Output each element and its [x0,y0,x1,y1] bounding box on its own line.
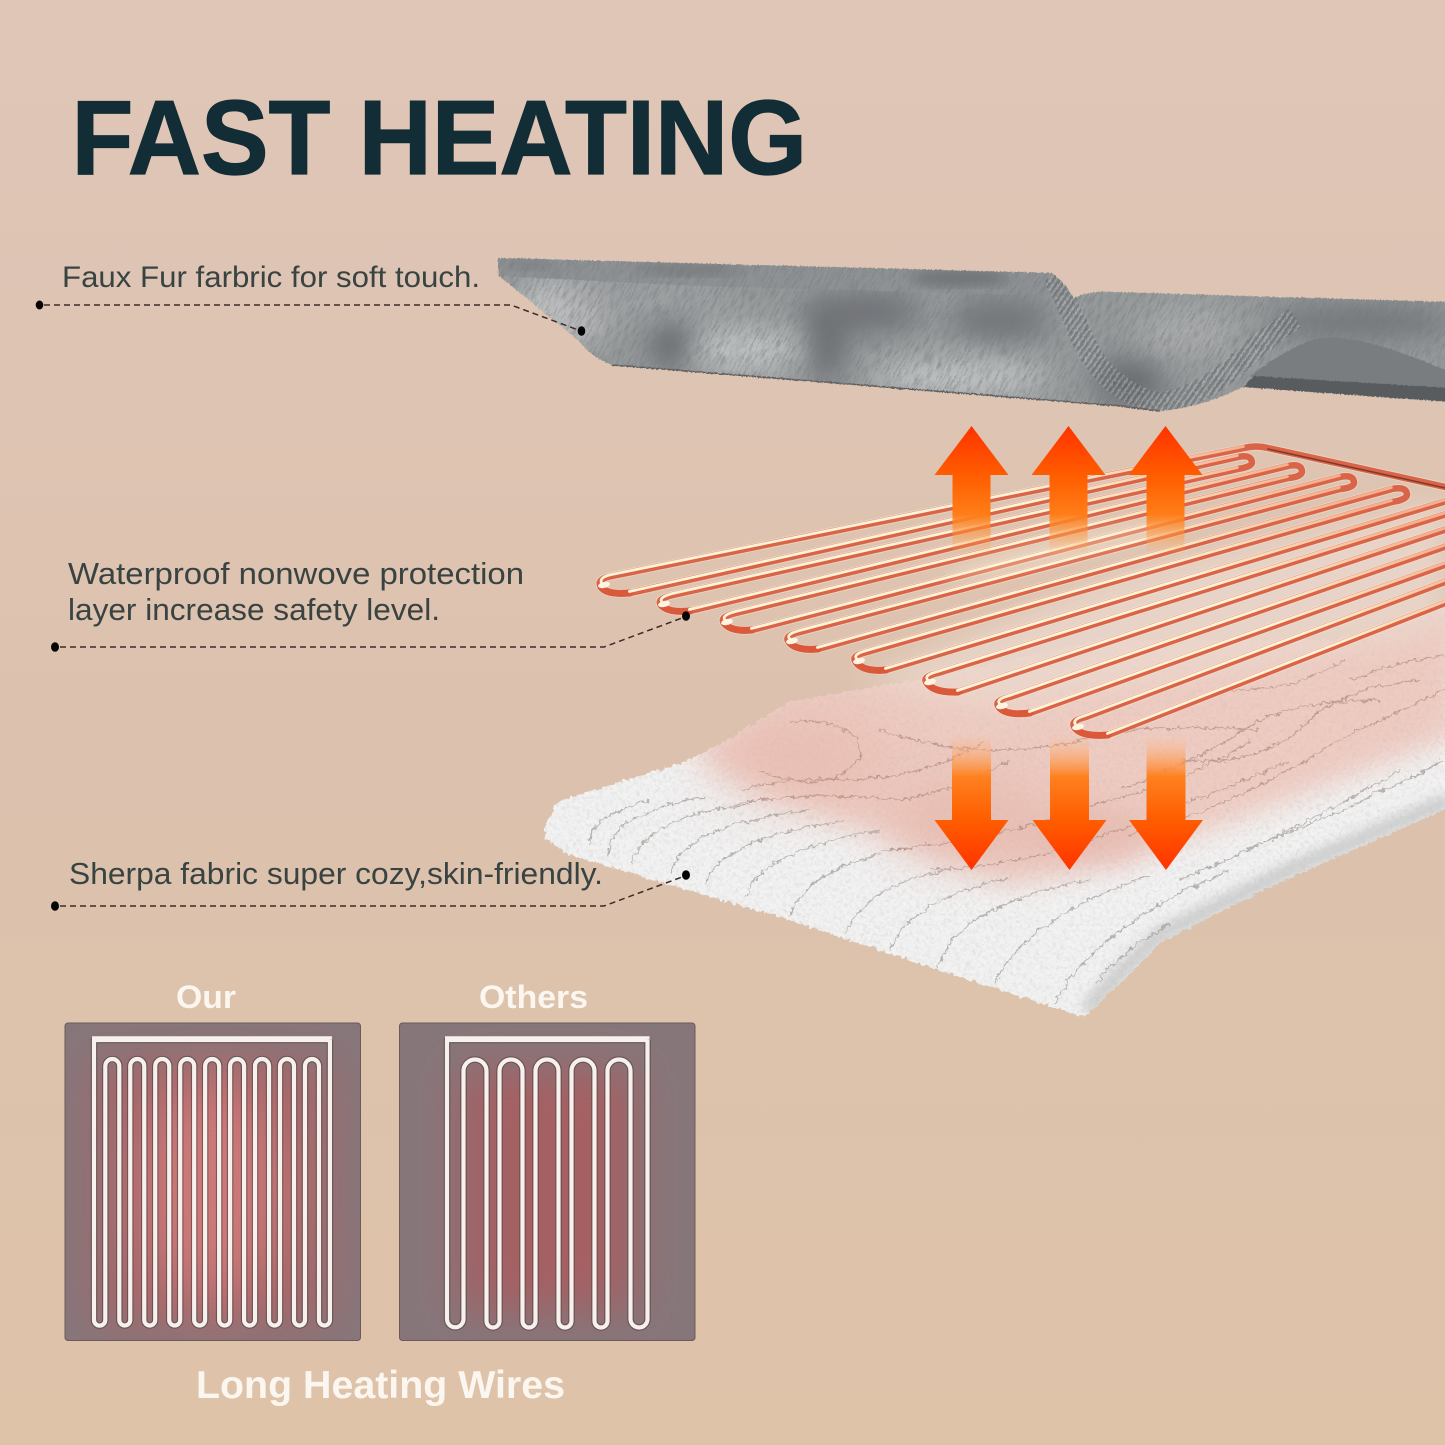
panel: our heating pad [65,1023,360,1340]
fleece ripple lines [590,760,1445,1003]
callout: faux fur: Faux Fur farbric for soft touch. [62,261,480,294]
warm pink heated area [690,590,1445,885]
title: FAST HEATING [72,79,807,197]
heading: our: Our [176,979,236,1015]
layer: sherpa fabric [530,590,1445,1025]
comparison: our wiring [65,979,360,1340]
heading: others: Others [479,979,588,1015]
down arrows [934,733,1203,870]
heating wire coil [598,446,1445,735]
diagonal fur streaks [498,258,1445,405]
faded protection layer behind wires [860,500,1445,710]
bright highlights on wire tips [598,581,1084,731]
fur top edge band [498,258,1064,292]
callout: sherpa fabric: Sherpa fabric super cozy,skin-friendly. [69,856,603,891]
callout: sherpa fabric [51,856,690,911]
callout: waterproof nonwoven layer: Waterproof nonwove protection [68,556,524,591]
caption: Long Heating Wires [196,1364,565,1407]
panel: others heating pad [400,1023,695,1340]
shaded underside of the fur sheet [1249,337,1445,392]
layer: faux fur fabric [497,258,1445,412]
fold of the fur sheet [1054,276,1295,404]
wire highlights, including around each bend [601,446,1445,734]
callout: waterproof nonwoven layer: layer increase safety level. [68,592,440,627]
up arrows [934,426,1202,556]
dense wire loop [92,1038,332,1326]
callout: waterproof nonwoven layer [51,556,690,652]
panel border: our [65,1023,360,1340]
grey shaded rim [1086,800,1445,1010]
panel border: others [400,1023,695,1340]
sparse wire loop [445,1038,650,1328]
callout: faux fur [36,261,585,336]
glow where heat rises [940,511,1180,589]
comparison: others wiring [400,979,695,1340]
copper crescents at wire bends [601,587,1108,735]
